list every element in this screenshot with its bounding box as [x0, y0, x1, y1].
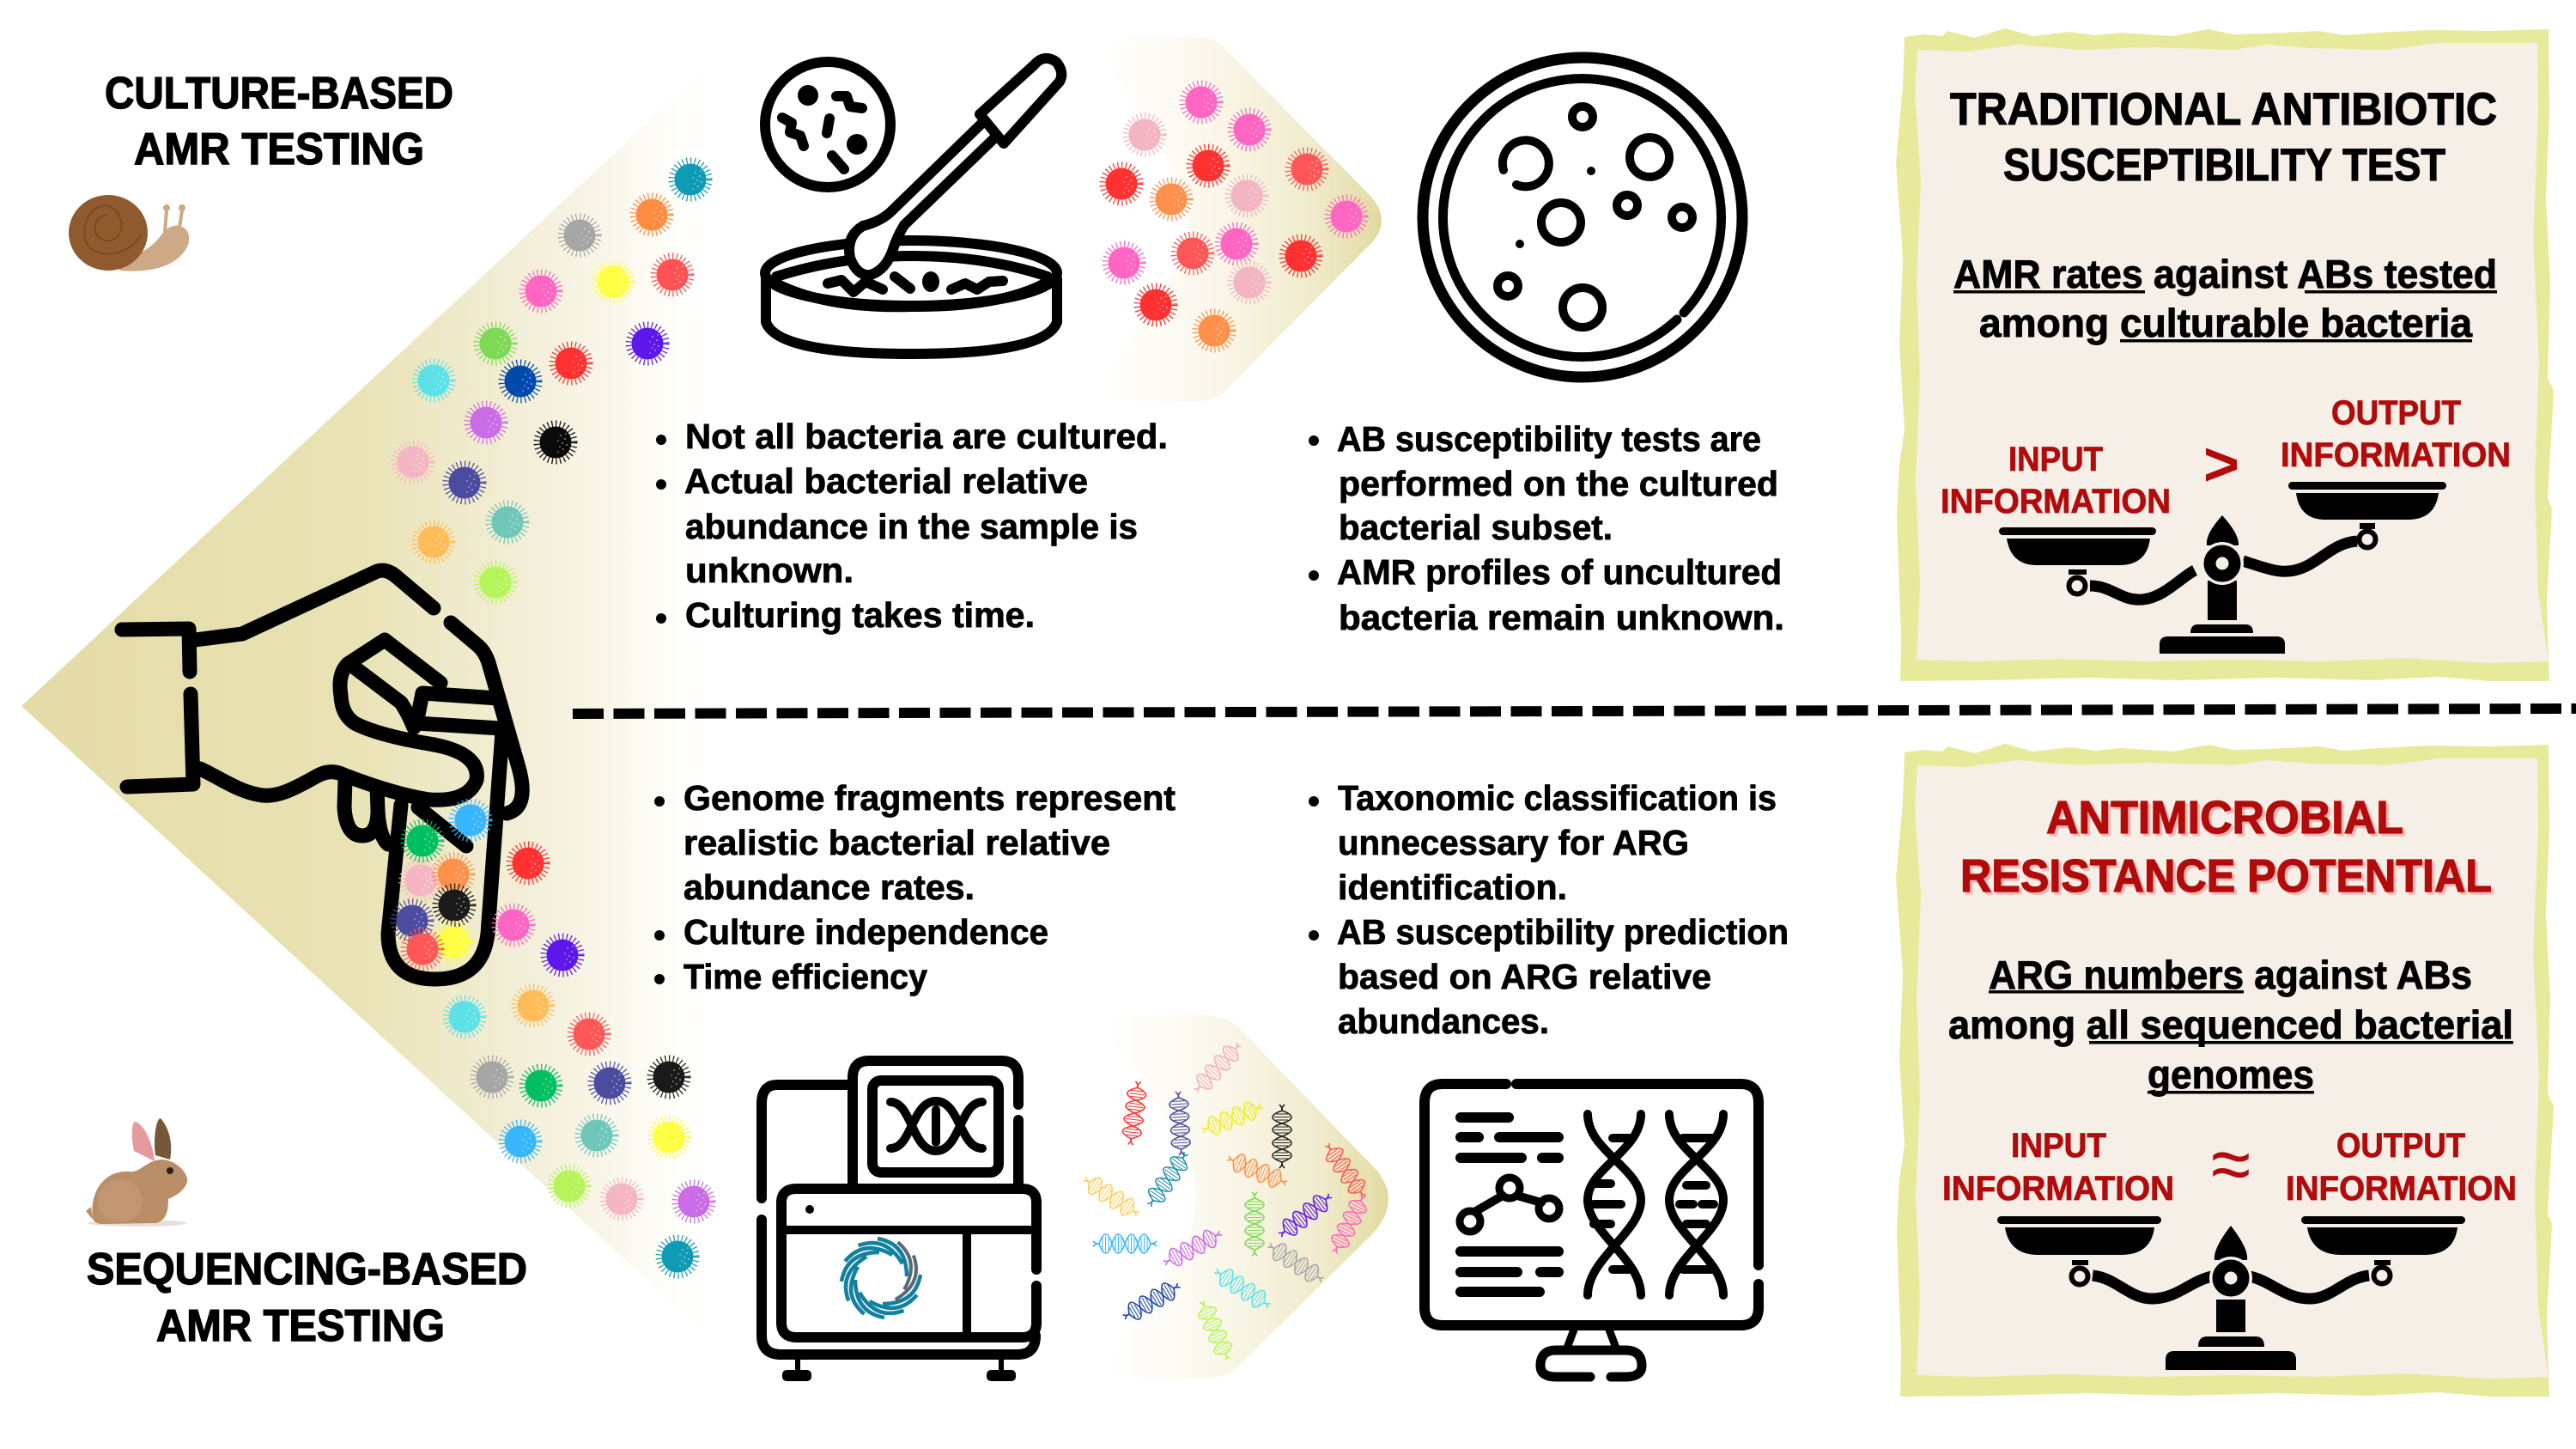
- icon: DNA sequencer: [762, 1061, 1036, 1381]
- output label: [2286, 1127, 2517, 1208]
- title: sequencing-based AMR testing: AMR TESTING: [156, 1301, 445, 1351]
- icon: unbalanced scale: [1999, 482, 2446, 654]
- text block: culture limitations: [656, 417, 1168, 635]
- description: [1953, 252, 2497, 345]
- bacteria cloud: inside the tube and lower spread: [393, 802, 713, 1275]
- description: among culturable bacteria: [1979, 301, 2472, 345]
- heading: RESISTANCE POTENTIAL: [1960, 850, 2492, 902]
- input label: [1942, 1127, 2174, 1208]
- icon: snail: [69, 195, 189, 271]
- approximately-equal sign: ≈: [2211, 1122, 2251, 1208]
- background: left fan of gradient: [21, 37, 859, 1390]
- output label: OUTPUT: [2336, 1127, 2465, 1165]
- text block: susceptibility tests: AB susceptibility tests are: [1337, 419, 1761, 459]
- text block: sequencing advantages: realistic bacterial relative: [683, 823, 1110, 862]
- panel: traditional antibiotic susceptibility test: [1896, 28, 2554, 681]
- text block: ARG prediction: identification.: [1338, 868, 1567, 907]
- icon: rabbit: [86, 1118, 187, 1227]
- input label: INPUT: [2008, 441, 2103, 478]
- input label: [1941, 441, 2171, 521]
- text block: ARG prediction: [1309, 778, 1789, 1041]
- description: AMR rates against ABs tested: [1953, 252, 2497, 296]
- heading: [1950, 84, 2497, 191]
- icon: petri dish with dropper: [765, 57, 1062, 354]
- text block: ARG prediction: unnecessary for ARG: [1338, 823, 1689, 862]
- text block: sequencing advantages: Culture independence: [683, 912, 1048, 952]
- description: [1948, 953, 2513, 1097]
- icon: monitor with DNA analysis: [1425, 1084, 1759, 1377]
- text block: susceptibility tests: bacteria remain unknown.: [1339, 598, 1784, 637]
- input label: INPUT: [2011, 1127, 2106, 1165]
- text block: culture limitations: Actual bacterial relative: [684, 461, 1088, 501]
- text block: culture limitations: abundance in the sample is: [685, 507, 1138, 546]
- heading: TRADITIONAL ANTIBIOTIC: [1950, 84, 2497, 135]
- heading: SUSCEPTIBILITY TEST: [2003, 140, 2445, 191]
- output label: INFORMATION: [2281, 436, 2511, 474]
- title: sequencing-based AMR testing: [87, 1245, 527, 1351]
- text block: ARG prediction: abundances.: [1338, 1002, 1549, 1041]
- text block: sequencing advantages: [654, 778, 1176, 996]
- description: genomes: [2148, 1052, 2314, 1097]
- text block: susceptibility tests: AMR profiles of uncultured: [1337, 552, 1782, 592]
- input label: INFORMATION: [1942, 1170, 2174, 1208]
- output label: OUTPUT: [2331, 394, 2461, 432]
- panel: antimicrobial resistance potential: [1896, 744, 2554, 1397]
- text block: culture limitations: Not all bacteria are cultured.: [685, 417, 1168, 456]
- description: among all sequenced bacterial: [1948, 1002, 2513, 1047]
- text block: culture limitations: unknown.: [685, 551, 854, 590]
- text block: ARG prediction: AB susceptibility prediction: [1337, 912, 1789, 952]
- heading: ANTIMICROBIAL: [2046, 792, 2403, 843]
- text block: ARG prediction: Taxonomic classification is: [1338, 778, 1777, 818]
- text block: susceptibility tests: bacterial subset.: [1339, 508, 1613, 547]
- title: culture-based AMR testing: [105, 69, 453, 174]
- chevron: cultured bacteria: [1091, 37, 1382, 401]
- icon: culture plate with colonies: [1423, 58, 1742, 377]
- text block: culture limitations: Culturing takes time.: [685, 595, 1035, 635]
- divider: dashed line: [573, 709, 2576, 714]
- text block: sequencing advantages: Time efficiency: [683, 957, 927, 996]
- chevron: sequenced DNA fragments: [1079, 1015, 1388, 1379]
- icon: balanced scale: [1997, 1216, 2465, 1370]
- input label: INFORMATION: [1941, 483, 2171, 521]
- title: culture-based AMR testing: CULTURE-BASED: [105, 69, 453, 119]
- title: sequencing-based AMR testing: SEQUENCING-BASED: [87, 1245, 527, 1294]
- description: ARG numbers against ABs: [1989, 953, 2472, 997]
- text block: sequencing advantages: Genome fragments represent: [683, 778, 1176, 818]
- heading: [1960, 792, 2492, 902]
- output label: INFORMATION: [2286, 1170, 2517, 1208]
- text block: sequencing advantages: abundance rates.: [683, 868, 975, 907]
- text block: susceptibility tests: performed on the cultured: [1339, 464, 1778, 503]
- title: culture-based AMR testing: AMR TESTING: [134, 125, 424, 174]
- bacteria cloud: upper, leaving the sample: [395, 161, 709, 601]
- icon: hand holding test tube: [122, 570, 522, 979]
- output label: [2281, 394, 2511, 474]
- text block: ARG prediction: based on ARG relative: [1338, 957, 1711, 996]
- greater-than sign: >: [2203, 430, 2239, 499]
- text block: susceptibility tests: [1309, 419, 1784, 637]
